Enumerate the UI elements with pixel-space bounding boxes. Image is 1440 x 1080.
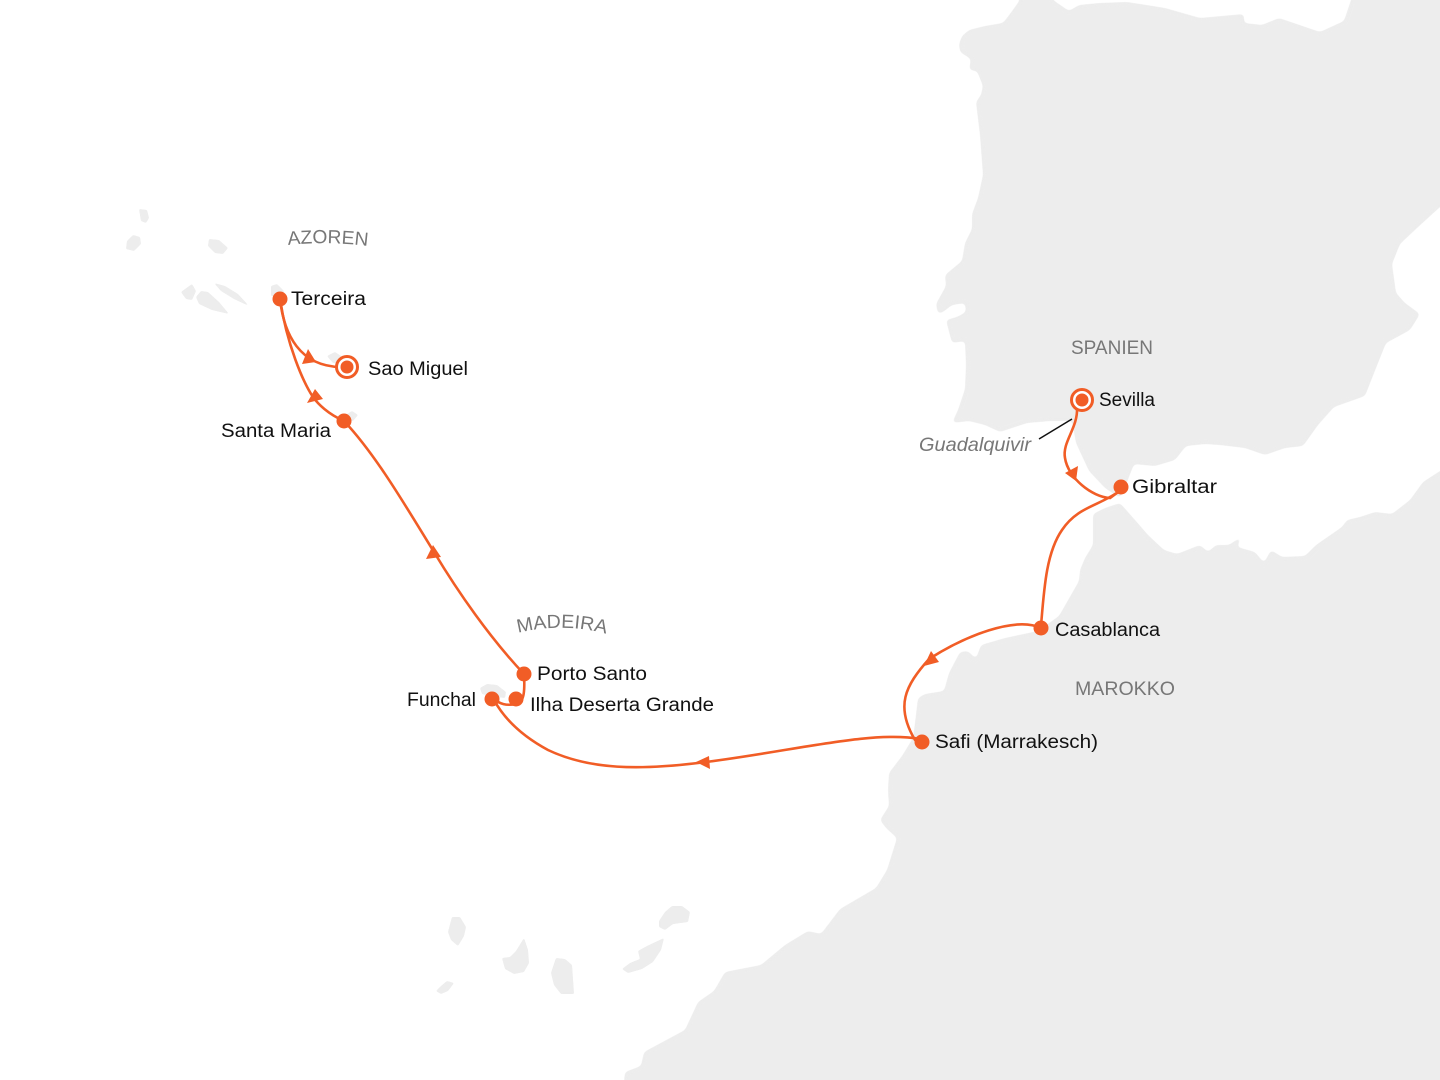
region label: Madeira: MADEIRA bbox=[517, 614, 606, 634]
region label: Marokko: MAROKKO bbox=[1075, 679, 1175, 700]
land: Iberian peninsula bbox=[936, 0, 1440, 498]
label: Sao Miguel: Sao Miguel bbox=[368, 359, 468, 380]
land: Canary Islands bbox=[436, 906, 690, 994]
leg: Casablanca to Safi bbox=[904, 624, 1041, 740]
land: Morocco and north-west Africa bbox=[620, 450, 1440, 1080]
land: Madeira bbox=[480, 684, 506, 698]
leg: Sevilla to Gibraltar bbox=[1065, 408, 1121, 498]
leg: Gibraltar to Casablanca bbox=[1041, 490, 1121, 626]
marker: Terceira bbox=[272, 292, 288, 306]
leg: Porto Santo to Santa Maria bbox=[344, 421, 524, 674]
marker: Gibraltar bbox=[1114, 480, 1128, 494]
label: Casablanca: Casablanca bbox=[1055, 620, 1160, 641]
label: Sevilla: Sevilla bbox=[1099, 390, 1155, 411]
arrow: towards Gibraltar bbox=[1065, 466, 1078, 481]
label: Santa Maria: Santa Maria bbox=[221, 421, 331, 442]
leg: Terceira to Sao Miguel bbox=[280, 299, 340, 367]
leg: Funchal to Ilha Deserta Grande bbox=[494, 699, 516, 705]
label: Funchal: Funchal bbox=[407, 690, 476, 711]
leg: Ilha Deserta Grande to Porto Santo bbox=[516, 674, 524, 704]
label: Safi (Marrakesch): Safi (Marrakesch) bbox=[935, 732, 1098, 753]
marker: Ilha Deserta Grande bbox=[508, 692, 524, 706]
region label: Spanien: SPANIEN bbox=[1071, 338, 1153, 359]
marker: Safi bbox=[914, 734, 930, 750]
arrow: towards Safi bbox=[924, 651, 939, 666]
arrow: towards Terceira bbox=[307, 389, 323, 403]
route line bbox=[280, 299, 1121, 767]
arrow: towards Santa Maria bbox=[426, 545, 441, 559]
leg: Santa Maria to Terceira bbox=[280, 299, 344, 421]
label: Ilha Deserta Grande: Ilha Deserta Grande bbox=[530, 695, 714, 716]
marker: Sao Miguel end bbox=[336, 356, 358, 378]
label: Guadalquivir river: Guadalquivir bbox=[919, 435, 1032, 456]
label: Porto Santo: Porto Santo bbox=[537, 664, 647, 685]
land: Azores islands bbox=[126, 209, 358, 421]
leg: Safi to Funchal bbox=[494, 700, 920, 767]
label: Gibraltar: Gibraltar bbox=[1132, 477, 1218, 498]
label: Terceira: Terceira bbox=[291, 289, 366, 310]
marker: Sevilla start bbox=[1072, 390, 1092, 410]
arrow: towards Funchal bbox=[696, 756, 710, 769]
marker: Casablanca bbox=[1034, 620, 1048, 636]
marker: Porto Santo bbox=[516, 666, 532, 682]
arrowheads bbox=[302, 349, 1078, 769]
arrow: towards Sao Miguel bbox=[302, 349, 316, 364]
marker: Funchal bbox=[484, 692, 500, 706]
region label: Azoren: AZOREN bbox=[288, 230, 368, 246]
leader line: Guadalquivir bbox=[1039, 419, 1072, 439]
marker: Santa Maria bbox=[336, 414, 352, 428]
